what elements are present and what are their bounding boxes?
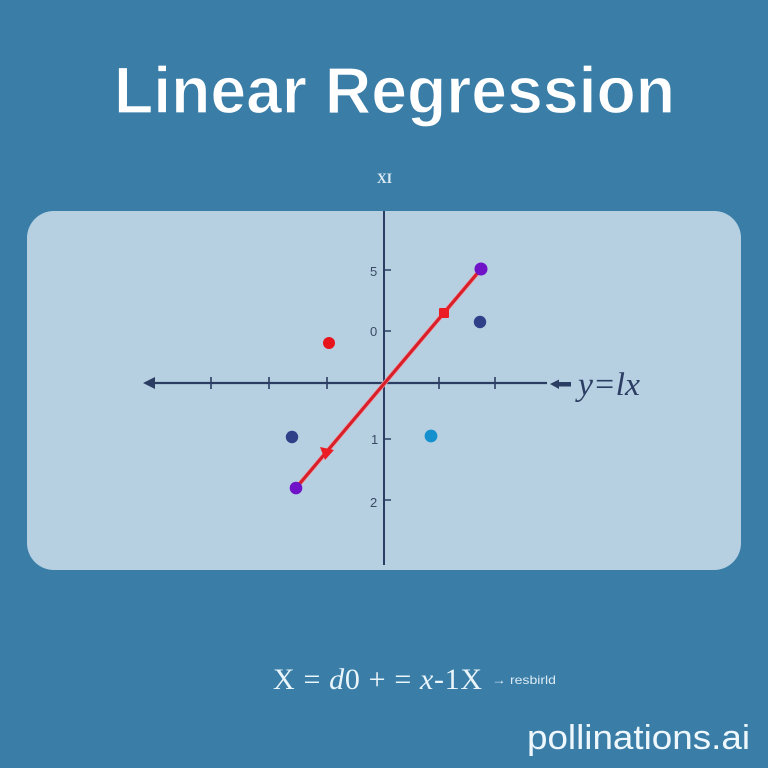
arrow: pointing to line label (550, 380, 571, 389)
data point: blue (425, 430, 437, 442)
formula: X = d0 + = x-1X (273, 663, 482, 696)
y axis tick labels: 5 (370, 264, 377, 279)
panel: chart background (27, 211, 741, 570)
data point: navy lower left (286, 431, 298, 443)
y axis tick labels: 0 (370, 324, 377, 339)
y axis tick labels: 1 (371, 432, 378, 447)
title: Linear Regression (114, 53, 675, 127)
data point: purple upper (474, 262, 488, 276)
y axis (384, 211, 391, 565)
x axis with arrowhead (143, 377, 547, 389)
line marker: diamond (439, 308, 449, 318)
formula note: → resbirld (492, 673, 556, 687)
y axis tick labels (370, 264, 378, 510)
regression line (296, 269, 481, 488)
axis top label: XI (377, 171, 392, 187)
line marker: arrowhead (320, 447, 334, 460)
line equation label: y=lx (575, 367, 640, 403)
watermark: pollinations.ai (527, 719, 750, 757)
data point: navy upper right (474, 316, 486, 328)
chart: linear regression plot (143, 211, 640, 565)
data point: red (323, 337, 335, 349)
y axis tick labels: 2 (370, 495, 377, 510)
data point: purple lower (290, 482, 302, 494)
